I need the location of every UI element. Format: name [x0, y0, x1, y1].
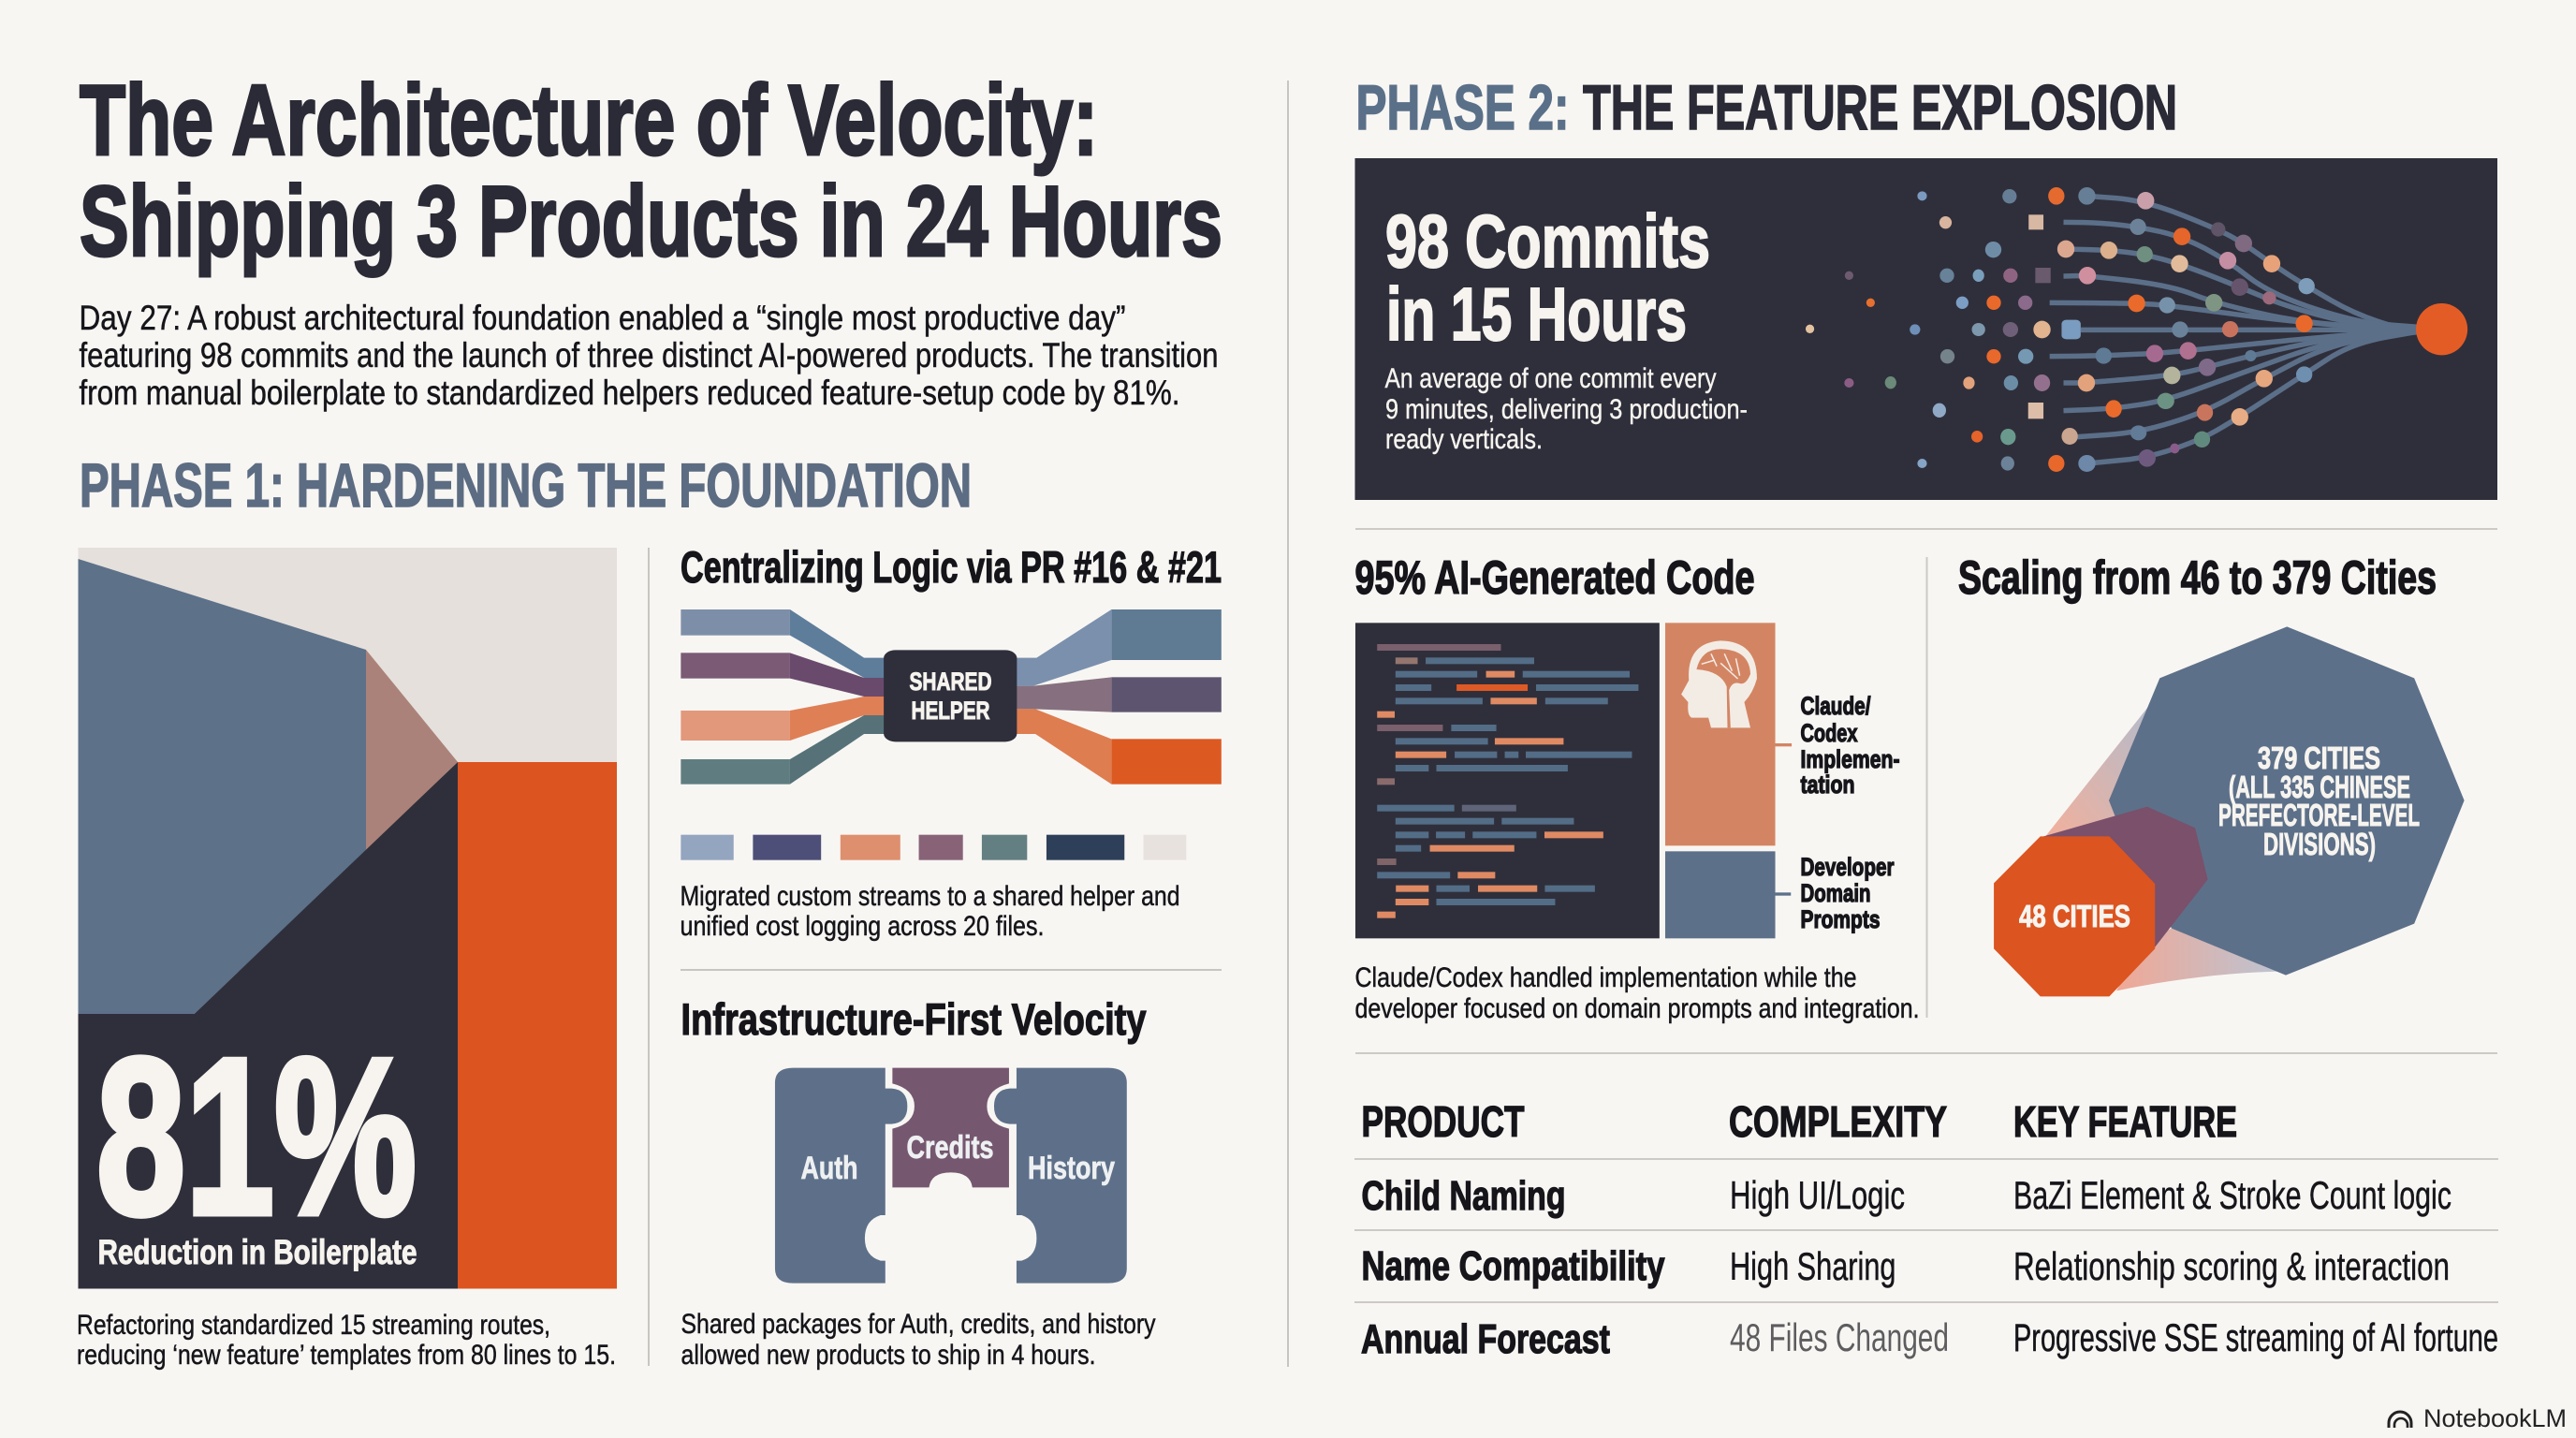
- caption: migrated streams: [680, 881, 1179, 942]
- table row: child naming: High UI/Logic: [1730, 1173, 1905, 1217]
- icon: head with brain: [1681, 640, 1757, 727]
- table header: KEY FEATURE: [2013, 1097, 2237, 1146]
- table row: child naming: Child Naming: [1361, 1173, 1565, 1219]
- intro text block: [79, 299, 1219, 412]
- heading: phase 2: [1355, 72, 2177, 143]
- table row: name compatibility: [1361, 1243, 2450, 1289]
- label: developer domain prompts: Developer: [1801, 853, 1895, 881]
- table row: name compatibility: High Sharing: [1730, 1244, 1896, 1288]
- AI implementation block with head icon: [1665, 623, 1776, 845]
- product table: [1354, 1097, 2498, 1362]
- label: developer domain prompts: Domain: [1801, 879, 1870, 907]
- label: 379 cities: 379 CITIES: [2258, 741, 2380, 775]
- heading: 95% AI-generated code: 95% AI-Generated Code: [1355, 551, 1754, 604]
- title: Shipping 3 Products in 24 Hours: [80, 165, 1222, 277]
- caption: Claude/Codex: [1355, 962, 1919, 1024]
- label: Claude/Codex implementation: Codex: [1801, 719, 1857, 747]
- caption: shared packages: Shared packages for Auth, credits, and history: [681, 1309, 1155, 1340]
- label: Claude/Codex implementation: [1801, 692, 1900, 799]
- label: 379 cities: (ALL 335 CHINESE: [2229, 770, 2410, 804]
- intro text block: from manual boilerplate to standardized helpers reduced feature-setup code by 81%.: [79, 374, 1179, 412]
- big stat: 81%: 81%: [96, 1013, 417, 1261]
- table row: annual forecast: Annual Forecast: [1361, 1316, 1610, 1362]
- table row: annual forecast: [1361, 1315, 2498, 1362]
- table header: PRODUCT: [1361, 1097, 1524, 1146]
- caption: refactoring: Refactoring standardized 15 streaming routes,: [77, 1310, 550, 1341]
- caption: migrated streams: Migrated custom streams to a shared helper and: [680, 881, 1179, 912]
- banner headline: [1385, 199, 1710, 356]
- label: Claude/Codex implementation: Claude/: [1801, 692, 1871, 720]
- stat label: Reduction in Boilerplate: [97, 1233, 417, 1271]
- label: developer domain prompts: Prompts: [1801, 905, 1880, 933]
- puzzle labels: Credits: [906, 1130, 994, 1166]
- centre divider: [1287, 81, 1289, 1367]
- panel: 98 commits banner: [1355, 158, 2497, 500]
- code panel with stylised code lines: [1355, 623, 1660, 938]
- caption: shared packages: [681, 1309, 1155, 1371]
- intro text block: Day 27: A robust architectural foundation enabled a “single most productive day”: [79, 299, 1125, 337]
- title: [80, 64, 1222, 277]
- label: Claude/Codex implementation: Implemen-: [1801, 745, 1900, 773]
- caption: Claude/Codex: Claude/Codex handled implementation while the: [1355, 962, 1857, 993]
- table header: [1361, 1097, 2237, 1146]
- colour swatches: [681, 835, 1186, 860]
- puzzle diagram: [775, 1068, 1127, 1284]
- heading: centralizing logic: Centralizing Logic via PR #16 & #21: [681, 542, 1222, 592]
- caption: migrated streams: unified cost logging across 20 files.: [680, 911, 1045, 942]
- banner subtext: An average of one commit every: [1385, 363, 1717, 394]
- banner headline: in 15 Hours: [1386, 272, 1687, 356]
- NotebookLM logo: NotebookLM: [2423, 1404, 2567, 1432]
- chart: commits converging dot stream: [1806, 187, 2467, 472]
- label: developer domain prompts: [1801, 853, 1895, 933]
- label: 48 cities: 48 CITIES: [2019, 899, 2130, 933]
- heading: phase 2: THE FEATURE EXPLOSION: [1583, 72, 2177, 143]
- chart: city scaling polygons: [1994, 626, 2465, 996]
- label: 379 cities: DIVISIONS): [2263, 827, 2376, 861]
- intro text block: featuring 98 commits and the launch of three distinct AI-powered products. The transition: [79, 336, 1219, 374]
- caption: Claude/Codex: developer focused on domain prompts and integration.: [1355, 993, 1919, 1024]
- table row: annual forecast: 48 Files Changed: [1730, 1315, 1949, 1359]
- banner subtext: [1385, 363, 1748, 455]
- heading: phase 1: PHASE 1: HARDENING THE FOUNDATION: [80, 450, 972, 520]
- label: Claude/Codex implementation: tation: [1801, 770, 1855, 799]
- caption: refactoring: [77, 1310, 616, 1371]
- banner headline: 98 Commits: [1385, 199, 1710, 283]
- label: shared helper: SHARED: [910, 668, 992, 696]
- puzzle labels: [801, 1130, 1115, 1186]
- table row: name compatibility: Name Compatibility: [1361, 1243, 1665, 1289]
- icon: NotebookLM arches: [2389, 1412, 2411, 1428]
- label: 379 cities: PREFECTORE-LEVEL: [2218, 798, 2420, 832]
- caption: shared packages: allowed new products to ship in 4 hours.: [681, 1340, 1095, 1371]
- table row: child naming: [1361, 1173, 2452, 1219]
- banner subtext: ready verticals.: [1385, 424, 1543, 455]
- chart: shared helper flow diagram: [681, 609, 1222, 785]
- table header: COMPLEXITY: [1729, 1097, 1947, 1146]
- heading: phase 2: PHASE 2:: [1355, 72, 1569, 143]
- label: 379 cities: [2218, 741, 2420, 861]
- puzzle labels: History: [1028, 1151, 1115, 1186]
- label: shared helper: HELPER: [912, 697, 990, 725]
- caption: refactoring: reducing ‘new feature’ templates from 80 lines to 15.: [77, 1340, 616, 1371]
- heading: infrastructure-first velocity: Infrastructure-First Velocity: [681, 994, 1146, 1044]
- divider left column: [648, 548, 650, 1366]
- panel: 81% reduction chart: [79, 548, 617, 1288]
- puzzle labels: Auth: [801, 1151, 857, 1186]
- developer prompts block: [1665, 743, 1792, 938]
- title: The Architecture of Velocity:: [80, 64, 1098, 176]
- banner subtext: 9 minutes, delivering 3 production-: [1385, 394, 1748, 425]
- label: shared helper: [910, 668, 992, 725]
